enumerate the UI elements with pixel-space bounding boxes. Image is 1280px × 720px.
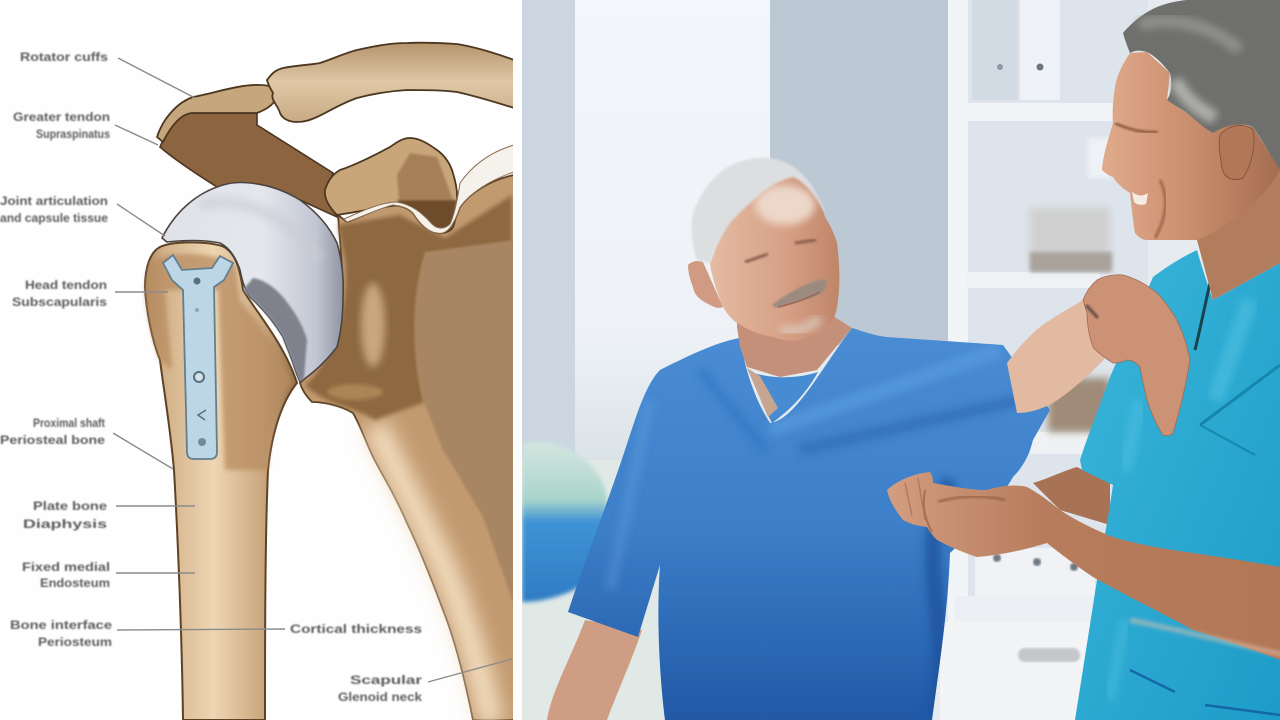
coracoid process	[325, 138, 457, 233]
label: joint articulation: Joint articulation	[0, 194, 108, 208]
shirt fold shading	[610, 350, 1020, 715]
label: diaphysis: Diaphysis	[23, 517, 107, 531]
label: periosteum: Periosteum	[38, 635, 112, 649]
panel: physiotherapy clinic photo	[522, 0, 1280, 720]
patient chest wedge	[747, 368, 778, 417]
exercise ball	[522, 442, 607, 602]
label: fixed medial: Fixed medial	[22, 560, 110, 574]
patient shirt	[568, 328, 1050, 720]
patient raised forearm	[1007, 300, 1110, 413]
patient neck	[737, 316, 852, 377]
patient forehead highlight	[755, 185, 815, 225]
label: head tendon: Head tendon	[25, 278, 107, 292]
patient white hair	[692, 158, 825, 263]
scrub details	[1110, 283, 1280, 715]
patient	[547, 158, 1110, 720]
patient drooping hand	[1083, 275, 1190, 436]
metal fixation plate	[163, 255, 233, 459]
scapula body	[300, 175, 514, 720]
patient far arm	[547, 620, 642, 720]
label: endosteum: Endosteum	[40, 576, 110, 590]
label: capsule: and capsule tissue	[0, 211, 108, 225]
clinic room background	[522, 0, 1280, 720]
clavicle	[267, 43, 514, 122]
therapist ear	[1219, 125, 1254, 180]
label: scapular: Scapular	[350, 673, 422, 687]
label: greater tendon: Greater tendon	[13, 110, 110, 124]
patient undershirt	[750, 372, 818, 423]
label: bone interface: Bone interface	[10, 618, 112, 632]
dark scapular blade panel	[415, 240, 514, 605]
patient mustache	[772, 279, 826, 308]
therapist far arm	[1033, 467, 1110, 525]
label: periosteal bone: Periosteal bone	[0, 433, 105, 447]
therapist	[887, 0, 1280, 720]
therapist neck	[1197, 170, 1280, 300]
label: plate bone: Plate bone	[33, 499, 107, 513]
shelving unit	[940, 0, 1115, 720]
leader lines	[113, 58, 512, 682]
silver implant dome	[162, 182, 343, 382]
label: supraspinatus: Supraspinatus	[36, 127, 110, 141]
therapist gray hair	[1123, 0, 1280, 170]
label: cortical thickness: Cortical thickness	[290, 622, 422, 636]
therapist scrubs	[1075, 250, 1280, 720]
humerus	[145, 242, 297, 720]
label: glenoid neck: Glenoid neck	[338, 690, 422, 704]
panel: white anatomy background	[0, 0, 522, 720]
cartilage strip	[344, 145, 514, 233]
patient ear	[688, 261, 723, 308]
label: subscapularis: Subscapularis	[12, 295, 107, 309]
therapist head	[1102, 0, 1280, 240]
therapist forearm and clasped hands	[887, 472, 1280, 662]
label: rotator cuff: Rotator cuffs	[20, 50, 108, 64]
panel: shoulder anatomy diagram	[145, 43, 514, 720]
anatomy labels	[0, 50, 422, 704]
patient head	[688, 158, 839, 341]
acromion	[157, 85, 337, 217]
label: proximal shaft: Proximal shaft	[33, 416, 105, 430]
